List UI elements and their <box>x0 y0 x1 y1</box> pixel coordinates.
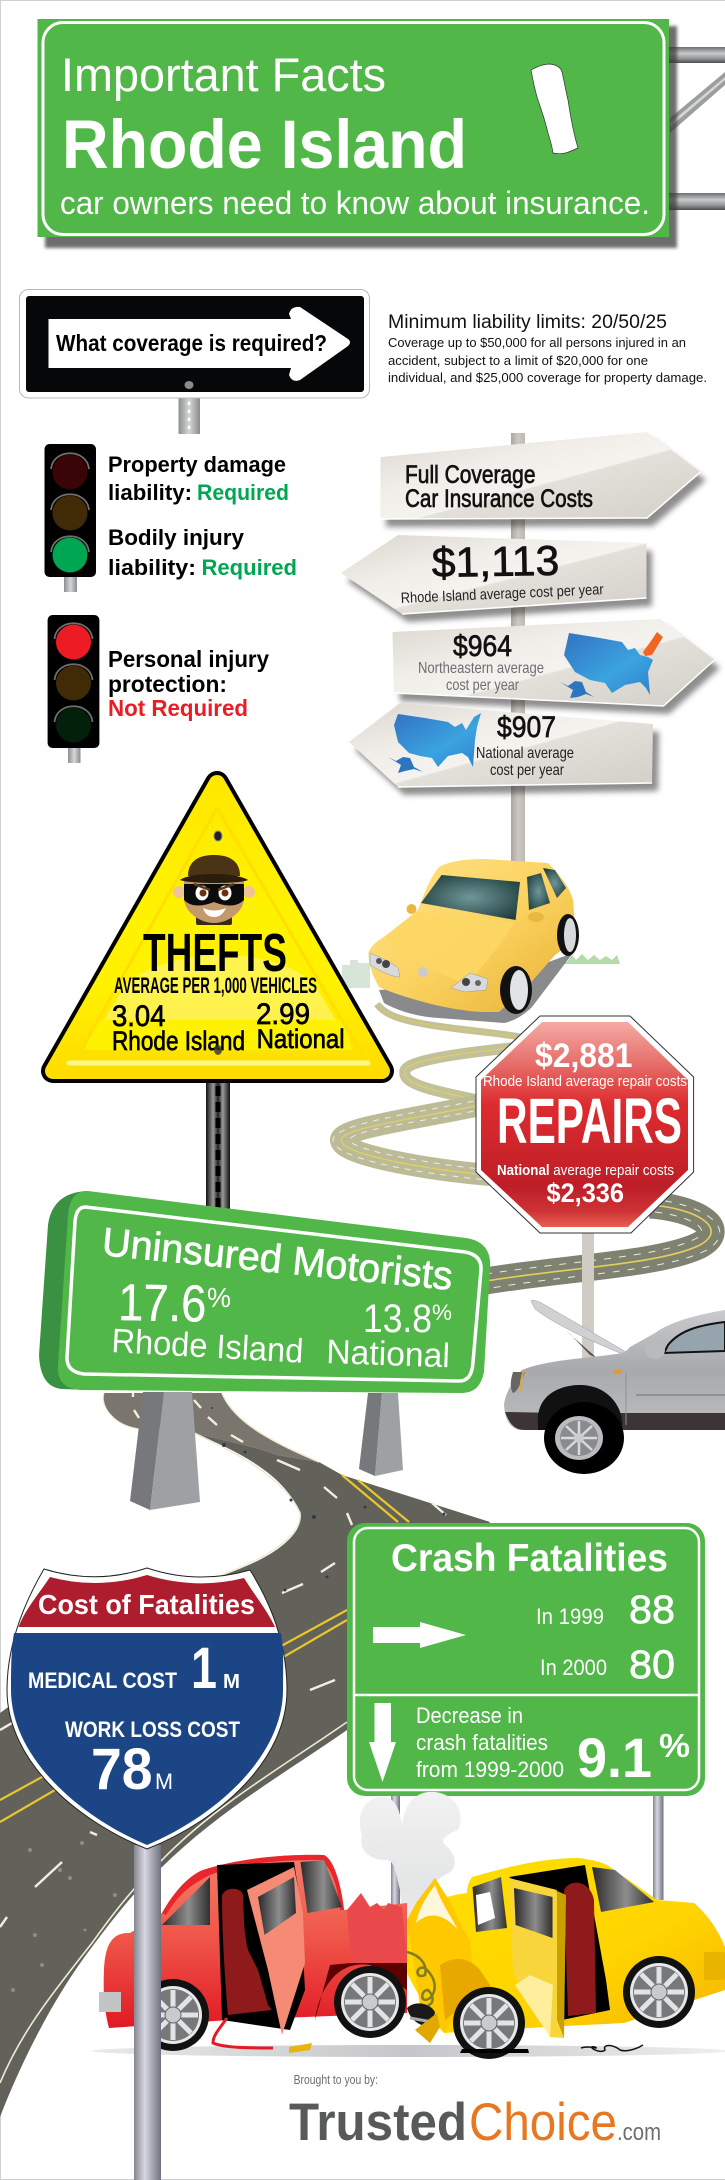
minimum liability text: Coverage up to $50,000 for all persons injured in an <box>388 335 686 350</box>
stat: national thefts <box>256 998 345 1054</box>
panel: Rhode Island cost sign: $1,113 <box>431 537 560 586</box>
panel: repairs stop sign: National average repair costs <box>497 1162 674 1179</box>
coverage: property damage <box>108 452 289 505</box>
stat: 9.1 percent <box>577 1726 690 1789</box>
icon: down arrow <box>369 1703 396 1782</box>
shield post <box>134 1845 161 2180</box>
map: USA with northeast highlighted <box>560 632 663 698</box>
one-way sign <box>20 290 370 398</box>
coverage: bodily injury: Required <box>202 555 297 580</box>
scenery behind car <box>342 954 620 988</box>
minimum liability text <box>388 312 707 385</box>
stat: 2000: 80 <box>629 1643 675 1687</box>
panel: national cost sign: $907 <box>497 711 556 744</box>
logo: TrustedChoice.com: Trusted <box>289 2093 467 2152</box>
ground shadow <box>92 2045 725 2057</box>
panel: repairs stop sign: $2,881 <box>535 1037 632 1075</box>
panel: full coverage sign <box>380 432 706 527</box>
coverage: personal injury protection: Personal injury <box>108 646 269 672</box>
title sign <box>38 19 677 248</box>
map: USA <box>388 713 481 773</box>
stat: 2000 <box>540 1643 675 1687</box>
minimum liability text: accident, subject to a limit of $20,000 for one <box>388 353 648 368</box>
traffic light: green <box>44 444 96 592</box>
crash heading: Crash Fatalities <box>391 1537 668 1580</box>
panel: uninsured motorists sign: % <box>207 1282 231 1313</box>
panel: uninsured motorists sign: 13.8 <box>363 1297 432 1341</box>
panel: Northeastern cost sign: cost per year <box>446 677 520 694</box>
panel: cost of fatalities shield <box>7 1568 287 1849</box>
road: main surface <box>0 1433 490 2117</box>
decrease text <box>416 1703 564 1782</box>
stat: medical cost <box>28 1636 240 1701</box>
crash sign posts <box>391 1796 664 1911</box>
stat: 1999 <box>536 1588 675 1632</box>
arrow <box>48 307 350 381</box>
stat: Rhode Island thefts: Rhode Island <box>112 1026 245 1056</box>
coverage: personal injury protection: Not Required <box>108 695 248 721</box>
coverage: bodily injury: liability: <box>108 555 196 580</box>
sign label: What coverage is required? <box>56 330 327 356</box>
stat: 1999: In 1999 <box>536 1604 604 1629</box>
title line 2: Rhode Island <box>62 106 467 183</box>
decrease text: crash fatalities <box>416 1730 548 1755</box>
panel: repairs stop sign: Rhode Island average repair costs <box>483 1073 687 1090</box>
logo: TrustedChoice.com: Choice <box>469 2093 617 2152</box>
panel: uninsured motorists sign: % <box>432 1300 452 1325</box>
icon: red crashed car <box>99 1855 407 2053</box>
stat: national thefts: National <box>257 1024 345 1054</box>
winding road background <box>0 1004 720 2117</box>
panel: crash fatalities sign <box>347 1523 705 1796</box>
support pillars <box>130 1392 403 1510</box>
stat: work loss cost: 78 <box>91 1737 153 1802</box>
icon: smoke <box>360 1792 461 1950</box>
coverage: property damage: Property damage <box>108 452 286 477</box>
icon: masked thief <box>173 855 255 925</box>
road: upper fold <box>103 1393 319 1462</box>
logo: TrustedChoice.com: .com <box>617 2119 661 2146</box>
icon: silver car with raised hood <box>504 1300 725 1474</box>
title line 1: Important Facts <box>61 48 386 101</box>
stat: 1999: 88 <box>629 1588 675 1632</box>
panel: national cost sign <box>349 703 659 795</box>
panel: repairs stop sign: $2,336 <box>546 1178 624 1208</box>
thefts subheading: AVERAGE PER 1,000 VEHICLES <box>114 973 317 998</box>
stat: Rhode Island thefts <box>112 1000 245 1056</box>
signpost pole <box>511 433 525 863</box>
decrease text: from 1999-2000 <box>416 1757 564 1782</box>
panel: uninsured motorists sign: Uninsured Motorists <box>100 1220 455 1299</box>
stat: work loss cost: M <box>155 1769 173 1794</box>
panel: Northeastern cost sign: $964 <box>453 630 512 663</box>
panel: full coverage sign: Full Coverage <box>405 461 536 489</box>
loose spring <box>581 2045 643 2051</box>
stat: work loss cost <box>65 1717 240 1802</box>
stat: medical cost: MEDICAL COST <box>28 1668 177 1693</box>
panel: thefts warning sign <box>53 783 382 1071</box>
panel: uninsured motorists sign: 17.6 <box>118 1274 207 1334</box>
coverage: property damage: liability: <box>108 480 192 505</box>
minimum liability text: Minimum liability limits: 20/50/25 <box>388 312 667 333</box>
coverage: personal injury protection <box>108 646 269 721</box>
panel: uninsured motorists sign: Rhode Island <box>111 1322 304 1371</box>
stat: 2000: In 2000 <box>540 1655 607 1680</box>
panel: Rhode Island cost sign: Rhode Island average cost per year <box>400 581 604 607</box>
icon: yellow car <box>368 859 579 1023</box>
coverage: property damage: Required <box>197 480 289 505</box>
post of one-way sign <box>178 398 200 434</box>
credit: brought to you by: Brought to you by: <box>294 2073 378 2087</box>
traffic light: red <box>48 615 99 763</box>
panel: Northeastern cost sign <box>392 619 720 714</box>
panel: Northeastern cost sign: Northeastern average <box>418 660 544 677</box>
logo: TrustedChoice.com <box>289 2093 661 2152</box>
panel: uninsured motorists sign <box>39 1191 490 1510</box>
title line 3: car owners need to know about insurance. <box>60 185 650 221</box>
decrease text: Decrease in <box>416 1703 523 1728</box>
panel: national cost sign: cost per year <box>490 762 565 779</box>
stat: Rhode Island thefts: 3.04 <box>112 1000 166 1033</box>
panel: full coverage sign: Car Insurance Costs <box>405 485 593 513</box>
thefts sign post <box>206 1083 230 1213</box>
coverage: bodily injury <box>108 525 297 580</box>
stat: medical cost: 1 <box>191 1636 217 1701</box>
header sign posts <box>669 47 725 210</box>
panel: uninsured motorists sign: National <box>326 1333 450 1375</box>
stop sign post <box>582 1233 594 1358</box>
coverage: bodily injury: Bodily injury <box>108 525 245 550</box>
stat: 9.1 percent: 9.1 <box>577 1726 652 1789</box>
panel: repairs stop sign <box>476 1016 694 1233</box>
stat: 9.1 percent: % <box>659 1727 690 1764</box>
stat: medical cost: M <box>223 1671 240 1693</box>
thefts heading: THEFTS <box>143 923 287 983</box>
icon: right arrow <box>373 1622 466 1648</box>
panel: national cost sign: National average <box>476 745 574 762</box>
icon: yellow crashed car <box>407 1858 725 2059</box>
shield heading: Cost of Fatalities <box>38 1589 255 1620</box>
minimum liability text: individual, and $25,000 coverage for property damage. <box>388 370 707 385</box>
icon: Rhode Island state <box>531 64 578 154</box>
stat: national thefts: 2.99 <box>256 998 310 1031</box>
panel: Rhode Island cost sign <box>341 535 652 622</box>
coverage: personal injury protection: protection: <box>108 671 227 697</box>
stat: work loss cost: WORK LOSS COST <box>65 1717 240 1742</box>
